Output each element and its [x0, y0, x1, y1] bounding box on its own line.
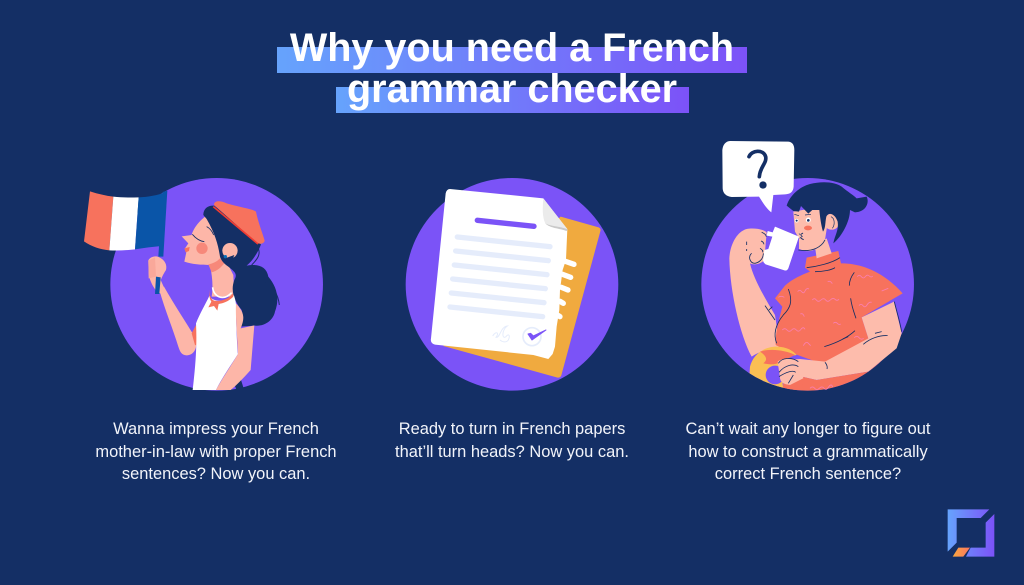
hand — [148, 256, 166, 294]
text block: caption two — [395, 420, 629, 460]
hair — [203, 206, 277, 327]
necklace and scarf — [213, 287, 232, 297]
title — [277, 26, 747, 113]
arm — [159, 287, 196, 355]
lower body, clipped to circle — [750, 346, 883, 391]
neck — [815, 238, 832, 258]
text block: caption one — [95, 420, 337, 483]
hair — [787, 182, 868, 243]
beret — [214, 201, 265, 244]
far arm — [216, 303, 254, 390]
icon: person drinking coffee with question bubble — [701, 141, 914, 402]
dress — [193, 295, 238, 390]
text block: caption three — [686, 420, 930, 483]
icon: signed document — [406, 178, 618, 391]
mug — [763, 227, 804, 271]
title: Why you need a French — [290, 26, 734, 70]
speech bubble — [722, 141, 794, 212]
text block: caption one: Wanna impress your French — [113, 420, 319, 438]
text block: caption two: Ready to turn in French papers — [399, 420, 625, 438]
icon: woman with French flag — [84, 178, 323, 391]
far arm and hand — [778, 302, 902, 383]
head — [787, 182, 868, 251]
text block: caption three: Can’t wait any longer to figure out — [686, 420, 930, 438]
panel: illustrations — [84, 141, 994, 557]
text block: caption two: that’ll turn heads? Now you can. — [395, 442, 629, 460]
text block: caption one: mother-in-law with proper French — [95, 442, 337, 460]
flag pole — [158, 191, 167, 257]
text block: caption three: correct French sentence? — [715, 465, 901, 483]
icon: logo — [948, 509, 994, 557]
neck and face — [182, 201, 279, 327]
shirt — [775, 251, 903, 365]
text block: caption three: how to construct a grammatically — [688, 442, 928, 460]
text block: caption one: sentences? Now you can. — [122, 465, 310, 483]
title: grammar checker — [347, 67, 677, 111]
arm — [729, 228, 780, 357]
fingers — [747, 232, 766, 263]
flag — [84, 191, 113, 250]
shirt squiggles — [778, 275, 888, 390]
shirt lines — [775, 258, 902, 347]
